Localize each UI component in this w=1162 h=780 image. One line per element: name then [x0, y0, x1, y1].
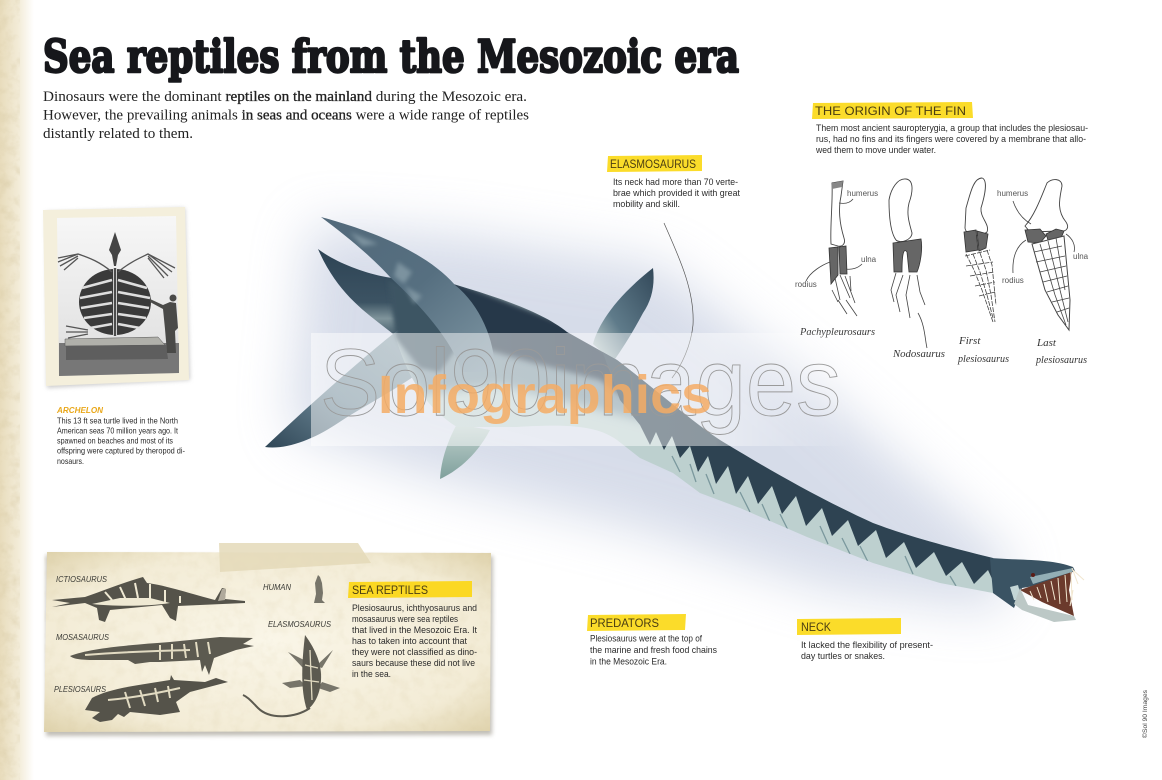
panel: sea reptiles [44, 543, 493, 736]
heading: sea reptiles [348, 581, 472, 598]
mosasaurus drawing [70, 637, 254, 675]
rear upper flipper [321, 217, 495, 372]
plesiosaurs drawing [85, 675, 228, 722]
ictiosaurus drawing [52, 577, 245, 622]
text: predators description: in the Mesozoic Era. [590, 656, 667, 666]
text: predators description: the marine and fresh food chains [590, 644, 717, 655]
species labels: HUMAN [263, 582, 292, 592]
icon: archelon skeleton [58, 232, 175, 338]
parchment card [44, 552, 493, 736]
tape [219, 543, 371, 572]
illustration: elasmosaurus [265, 217, 1084, 622]
callout: neck [797, 618, 933, 661]
text: archelon description: offspring were captured by theropod di- [57, 446, 185, 456]
text: predators description [590, 632, 717, 666]
text: archelon description [57, 416, 185, 466]
text: sea reptiles description: mosasaurus were sea reptiles [352, 613, 458, 624]
text: fin description: Them most ancient sauropterygia, a group that includes the plesiosau- [816, 122, 1088, 133]
panel: archelon [43, 207, 190, 466]
copyright: ©Sol 90 Images [1141, 689, 1149, 738]
illustration glow [290, 225, 1010, 610]
drawing: first plesiosaurus fin [957, 178, 1009, 365]
front right flipper [593, 268, 654, 362]
rear lower flipper [318, 249, 425, 338]
text: elasmosaurus description: brae which provided it with great [613, 187, 740, 198]
species labels: ELASMOSAURUS [268, 619, 331, 629]
callout: elasmosaurus [607, 155, 740, 209]
body and neck [398, 284, 994, 593]
text: sea reptiles description: Plesiosaurus, ichthyosaurus and [352, 602, 477, 613]
text: predators description: Plesiosaurus were at the top of [590, 632, 702, 644]
left big flipper [265, 330, 425, 448]
species labels [54, 574, 331, 694]
text: neck description: It lacked the flexibility of present- [801, 639, 933, 650]
front lower flipper [440, 424, 490, 479]
drawing: pachypleurosaurus fin: humerus [847, 189, 878, 198]
flipper mottling [350, 232, 422, 304]
icon: man beside skeleton [150, 294, 178, 353]
label: pachypleurosaurs: Pachypleurosaurs [799, 326, 875, 338]
text: archelon description: This 13 ft sea turtle lived in the North [57, 416, 178, 426]
text: neck description [801, 639, 933, 661]
watermark: sol90images: Sol90images [320, 330, 841, 436]
intro text: However, the prevailing animals in seas and oceans were a wide range of reptiles [43, 108, 529, 124]
text: elasmosaurus description [613, 176, 740, 209]
heading: predators: PREDATORS [590, 616, 659, 630]
drawing: pachypleurosaurus fin [795, 181, 878, 316]
intro text: Dinosaurs were the dominant reptiles on the mainland during the Mesozoic era. [43, 89, 527, 105]
callout: predators [587, 614, 717, 666]
elasmosaurus drawing [243, 635, 340, 716]
drawing: last plesiosaurus fin: ulna [1073, 252, 1089, 261]
panel: the origin of the fin [795, 102, 1089, 366]
text: elasmosaurus description: Its neck had more than 70 verte- [613, 176, 738, 187]
neck belly streaks [672, 456, 956, 586]
intro text [43, 89, 529, 142]
species labels: PLESIOSAURS [54, 684, 106, 694]
drawing: last plesiosaurus fin: Last [1036, 337, 1057, 349]
text: fin description [815, 122, 1088, 155]
text: sea reptiles description [352, 602, 477, 679]
dark patch behind flipper [388, 280, 462, 372]
text: sea reptiles description: they were not classified as dino- [352, 646, 477, 657]
drawing: nodosaurus fin [889, 179, 945, 360]
text: fin description: rus, had no fins and its fingers were covered by a membrane that allo- [816, 133, 1086, 144]
drawing: last plesiosaurus fin: plesiosaurus [1035, 354, 1087, 366]
parchment left edge [0, 0, 34, 780]
text: sea reptiles description: that lived in the Mesozoic Era. It [352, 624, 477, 635]
text: elasmosaurus description: mobility and skill. [613, 198, 680, 209]
drawing: first plesiosaurus fin: plesiosaurus [957, 353, 1009, 365]
drawing: last plesiosaurus fin: humerus [997, 189, 1028, 198]
species labels: ICTIOSAURUS [56, 574, 107, 584]
text: archelon description: nosaurs. [57, 457, 84, 466]
text: sea reptiles description: saurs because these did not live [352, 657, 475, 668]
drawing: pachypleurosaurus fin: rodius [795, 280, 817, 289]
heading: archelon: ARCHELON [56, 405, 104, 415]
drawing: pachypleurosaurus fin: ulna [861, 255, 877, 264]
text: fin description: wed them to move under water. [815, 144, 936, 155]
drawing: last plesiosaurus fin [997, 180, 1089, 366]
intro text: distantly related to them. [43, 126, 193, 142]
callout line [664, 223, 693, 378]
photo card [43, 207, 190, 388]
heading: the origin of the fin: THE ORIGIN OF THE FIN [815, 104, 966, 118]
text: sea reptiles description: in the sea. [352, 668, 391, 679]
heading: sea reptiles: SEA REPTILES [352, 583, 428, 597]
head [990, 558, 1084, 622]
species labels: MOSASAURUS [56, 632, 109, 642]
watermark: sol90images: Infographics [378, 365, 712, 425]
neck dark flames [603, 352, 994, 584]
human figure [314, 575, 325, 603]
text: sea reptiles description: has to taken into account that [352, 635, 467, 646]
text: neck description: day turtles or snakes. [801, 650, 885, 661]
title: Sea reptiles from the Mesozoic era [43, 30, 739, 83]
text: archelon description: American seas 70 million years ago. It [57, 426, 179, 436]
heading: elasmosaurus: ELASMOSAURUS [610, 157, 696, 171]
drawing: last plesiosaurus fin: rodius [1002, 276, 1024, 285]
drawing: first plesiosaurus fin: First [958, 335, 981, 347]
heading: neck: NECK [801, 620, 831, 634]
text: archelon description: spawned on beaches and most of its [57, 436, 173, 446]
drawing: nodosaurus fin: Nodosaurus [892, 348, 945, 360]
